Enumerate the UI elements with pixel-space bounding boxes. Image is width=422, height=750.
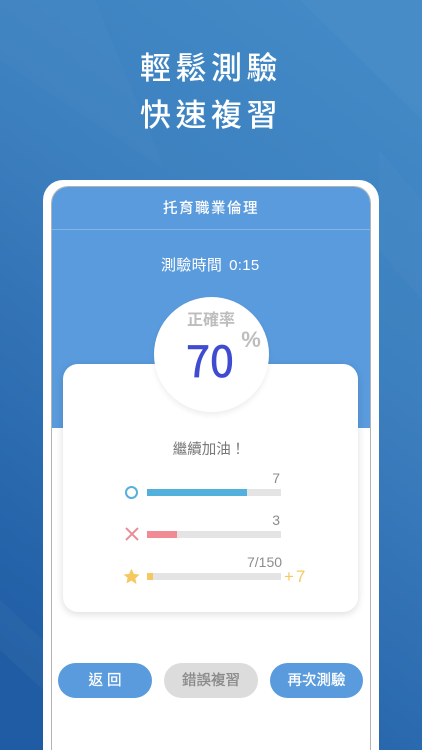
star icon bbox=[124, 568, 140, 584]
encouragement: 繼續加油！ bbox=[173, 442, 245, 458]
quiz time: 測驗時間 0:15 bbox=[161, 257, 260, 274]
wrong row bbox=[125, 512, 281, 541]
correct bar bbox=[147, 489, 281, 496]
correct icon bbox=[125, 486, 138, 499]
button: review mistakes: 錯誤複習 bbox=[182, 673, 240, 689]
points gained: +7 bbox=[284, 567, 307, 586]
button: review mistakes bbox=[164, 663, 258, 698]
percent sign: % bbox=[241, 327, 261, 352]
title: 輕鬆測驗 bbox=[140, 51, 282, 86]
title: 快速複習 bbox=[140, 98, 282, 133]
points row bbox=[124, 554, 307, 586]
score value: 70 bbox=[186, 328, 234, 390]
points bar bbox=[147, 573, 281, 580]
score label: 正確率 bbox=[187, 312, 235, 329]
button: retake: 再次測驗 bbox=[288, 673, 346, 689]
screen title: 托育職業倫理 bbox=[163, 201, 259, 217]
phone frame bbox=[43, 180, 379, 750]
wrong bar bbox=[147, 531, 281, 538]
correct row bbox=[125, 470, 281, 499]
result card bbox=[63, 364, 358, 612]
score circle bbox=[154, 297, 269, 412]
correct count: 7 bbox=[272, 470, 280, 486]
blue header panel bbox=[52, 187, 370, 428]
button: back bbox=[58, 663, 152, 698]
header divider bbox=[52, 229, 370, 230]
title bbox=[140, 51, 282, 133]
wrong icon bbox=[125, 527, 139, 541]
button: back: 返 回 bbox=[88, 673, 122, 689]
app screen bbox=[51, 186, 371, 750]
wrong count: 3 bbox=[272, 512, 280, 528]
button: retake bbox=[270, 663, 363, 698]
points count: 7/150 bbox=[247, 554, 282, 570]
